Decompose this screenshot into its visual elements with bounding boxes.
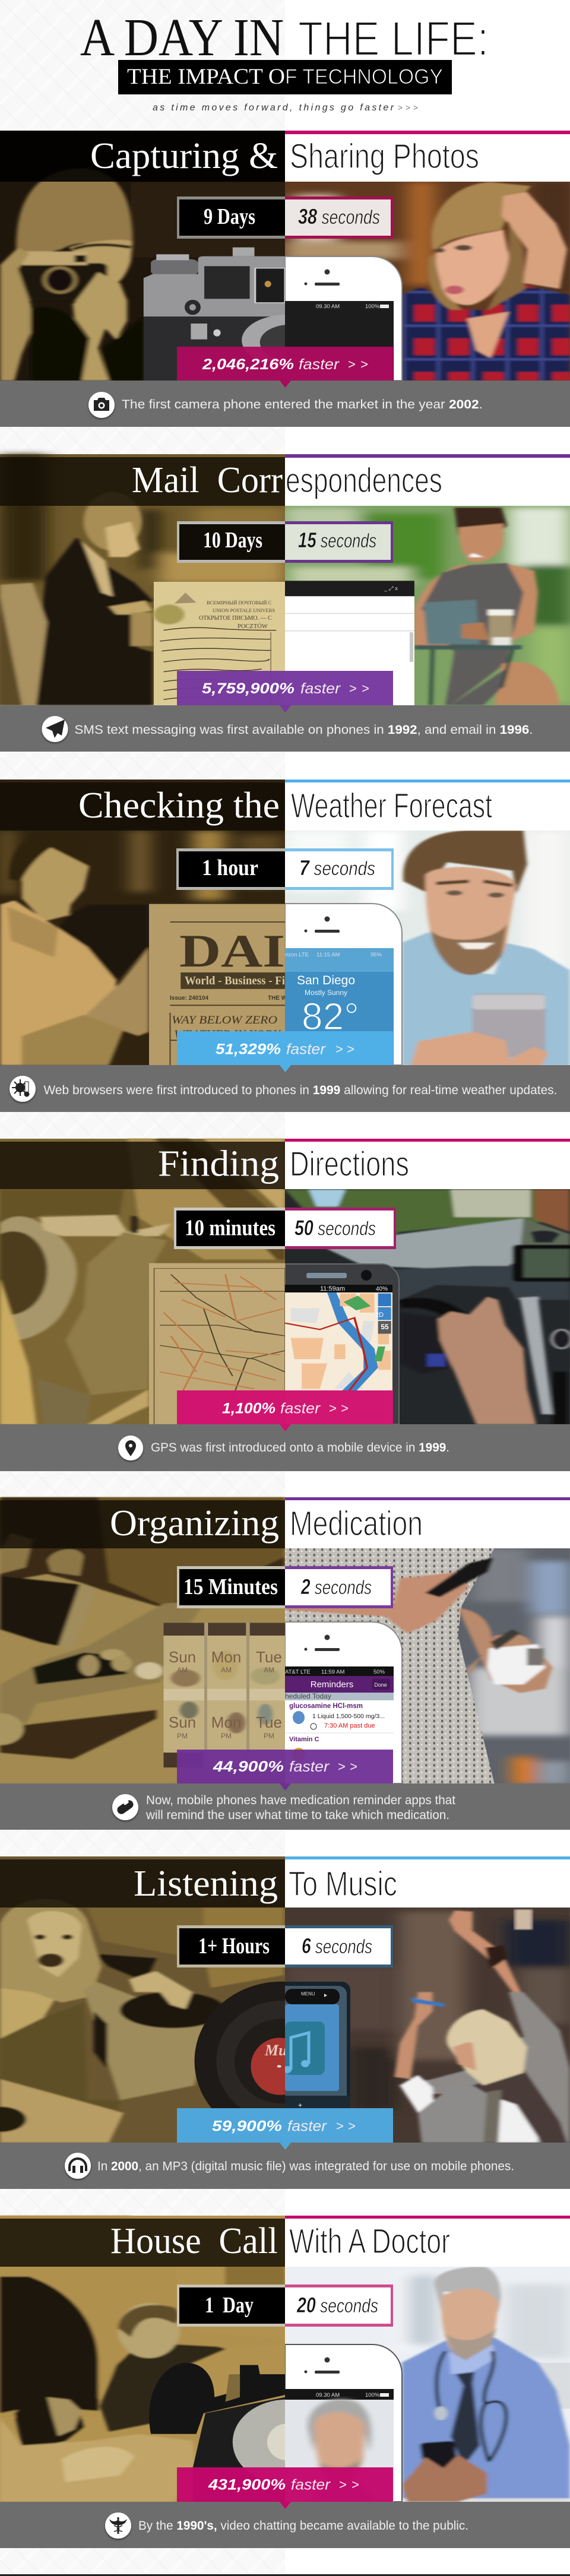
fact text: [145, 1794, 455, 1822]
accent bar: [285, 2216, 570, 2219]
section heading: [78, 785, 492, 826]
time comparison box: [177, 1566, 393, 1608]
accent bar: [285, 1139, 570, 1142]
speed bar: faster: [291, 2477, 331, 2493]
section heading: Directions: [290, 1145, 409, 1184]
speed bar: 59,900%: [212, 2118, 282, 2135]
modern photo: woman dancing with MP3 player: [283, 1908, 570, 2143]
vintage photo: man reading newspaper: [0, 780, 287, 1065]
section heading: With A Doctor: [289, 2222, 450, 2261]
time comparison box: 15 Minutes: [183, 1574, 278, 1599]
vintage photo: woman writing and postcard: [0, 454, 285, 705]
icon: smartphone with video chat: 09.30 AM: [316, 2392, 340, 2398]
time comparison box: [177, 2285, 393, 2327]
time comparison box: [177, 197, 393, 239]
section heading: [134, 1864, 397, 1904]
icon: smartphone with reminders app: 11:59 AM: [321, 1669, 345, 1675]
section: finding directions: [0, 1139, 570, 1471]
time comparison box: 38 seconds: [298, 204, 380, 229]
icon: sun and thermometer: [10, 1076, 36, 1102]
speed bar: > >: [338, 1759, 357, 1774]
vintage photo: hand with pills and organizer: Tue: [256, 1713, 282, 1731]
speed bar: > >: [335, 1041, 354, 1057]
vintage photo: man reading newspaper: DAI: [179, 925, 285, 977]
icon: smartphone with reminders app: glucosamine HCl-msm: [289, 1703, 363, 1710]
header band: modern: [285, 780, 570, 831]
time comparison box: 15 seconds: [298, 528, 376, 552]
header band: modern: [285, 1856, 570, 1908]
section heading: Listening: [134, 1864, 278, 1904]
section heading: Capturing &: [90, 136, 278, 176]
icon: smartphone with weather app: 11:15 AM: [316, 952, 340, 958]
time comparison box: [177, 521, 393, 563]
icon: paper plane: [42, 716, 68, 742]
speed bar: [177, 347, 393, 381]
speed bar: faster: [300, 680, 341, 697]
subtitle banner: F TECHNOLOGY: [285, 65, 443, 88]
icon: pill capsule: [112, 1794, 138, 1820]
vintage photo: hand with pills and organizer: PM: [221, 1732, 232, 1740]
postcard printed text: POCZTÓW: [238, 623, 268, 630]
vintage photo: man reading newspaper: WEATHER IN YORK: [174, 1028, 281, 1041]
vintage photo: hand with pills and organizer: AM: [177, 1666, 188, 1674]
time comparison box: 1+ Hours: [198, 1934, 270, 1959]
icon: smartphone with video chat: [285, 2344, 402, 2502]
speed bar: faster: [280, 1400, 321, 1417]
speed bar: 5,759,900%: [202, 680, 294, 697]
fact bar: [0, 1424, 570, 1471]
icon: smartphone with weather app: [285, 904, 402, 1065]
icon: smartphone with weather app: rizon LTE: [285, 952, 309, 958]
icon: camera: [88, 392, 115, 418]
icon: smartphone with reminders app: Reminders: [311, 1680, 353, 1690]
section heading: Medication: [290, 1504, 423, 1543]
section heading: espondences: [286, 461, 442, 500]
header band: modern: [285, 131, 570, 182]
icon: smartphone with reminders app: 1 Liquid 1,500-500 mg/3...: [312, 1713, 385, 1720]
postcard printed text: UNION POSTALE UNIVERS: [213, 607, 275, 613]
pill organizer: [163, 1623, 285, 1767]
vintage photo: hand with pills and organizer: Sun: [169, 1648, 196, 1666]
accent bar: [285, 780, 570, 782]
icon: smartphone with weather app: 82°: [302, 995, 359, 1038]
fact bar: In 2000, an MP3 (digital music file) was integrated for use on mobile phones.: [97, 2160, 514, 2173]
fact bar: Web browsers were first introduced to phones in 1999 allowing for real-time weather updates.: [44, 1083, 558, 1097]
header band: modern: [285, 2216, 570, 2267]
title: A DAY IN: [80, 8, 284, 67]
section heading: [110, 1503, 423, 1544]
section heading: [132, 460, 442, 500]
section heading: Weather Forecast: [291, 787, 492, 825]
speed bar: > >: [349, 681, 369, 696]
time comparison box: 50 seconds: [294, 1216, 376, 1240]
modern photo: doctor using phone: [285, 2265, 570, 2503]
vintage photo: hand with pills and organizer: Mon: [211, 1713, 241, 1731]
time comparison box: 1 hour: [202, 856, 258, 880]
vintage photo: car passengers and map: [0, 1139, 285, 1424]
section heading: To Music: [289, 1865, 397, 1903]
vintage photo: hand with pills and organizer: AM: [221, 1666, 232, 1674]
newspaper: [149, 904, 285, 1065]
speed bar: > >: [339, 2477, 359, 2492]
speed bar: [177, 1031, 393, 1065]
section: house call with a doctor: [0, 2216, 570, 2548]
time comparison box: 9 Days: [204, 204, 255, 229]
speed bar: > >: [348, 357, 368, 372]
vintage photo: hand with pills and organizer: Tue: [256, 1648, 282, 1666]
speed bar: [177, 2467, 393, 2502]
header band: modern: [285, 1497, 570, 1548]
accent bar: [285, 1497, 570, 1500]
icon: smartphone: [285, 256, 402, 381]
section: organizing medication: [0, 1497, 570, 1830]
tagline: >>>: [398, 103, 418, 112]
icon: smartphone with weather app: Mostly Sunny: [305, 988, 347, 997]
time comparison box: [174, 1208, 396, 1249]
vintage photo: man reading newspaper: Issue: 240104: [170, 995, 208, 1002]
header band: vintage: [0, 1500, 285, 1548]
icon: smartphone with video chat: 100%: [365, 2392, 380, 2398]
vintage photo: woman with record player: Mus: [264, 2042, 293, 2059]
modern photo: woman with tablet in park: _ ⤢ x: [384, 585, 398, 592]
time comparison box: 6 seconds: [302, 1934, 372, 1958]
speed bar: > >: [329, 1401, 349, 1415]
speed bar: faster: [287, 2118, 328, 2135]
vintage photo: hand with pills and organizer: Mon: [211, 1648, 241, 1666]
icon: MP3 player: +: [298, 2101, 302, 2109]
icon: smartphone with weather app: San Diego: [297, 974, 355, 987]
icon: smartphone with reminders app: Vitamin C: [289, 1736, 319, 1743]
vintage photo: woman with record player: [0, 1856, 369, 2143]
postcard printed text: ВСЕМІРНЫЙ ПОЧТОВЫЙ С: [207, 600, 272, 606]
accent bar: [285, 131, 570, 134]
fact bar: [0, 381, 570, 427]
section: mail correspondences: [0, 454, 570, 752]
icon: smartphone with reminders app: heduled Today: [285, 1692, 331, 1700]
section heading: House Call: [110, 2221, 278, 2261]
fact bar: By the 1990's, video chatting became available to the public.: [138, 2519, 468, 2533]
icon: GPS phone: [285, 1264, 399, 1424]
fact bar: [0, 2502, 570, 2548]
speed bar: [177, 671, 393, 705]
speed bar: 44,900%: [213, 1758, 284, 1775]
icon: headphones: [65, 2153, 91, 2179]
speed bar: > >: [336, 2118, 356, 2134]
icon: smartphone with reminders app: Done: [374, 1682, 387, 1688]
speed bar: 431,900%: [208, 2477, 286, 2493]
vintage photo: hand with pills and organizer: PM: [264, 1732, 274, 1740]
vintage photo: man reading newspaper: World - Business - Fi: [185, 974, 285, 987]
header band: vintage: [0, 131, 285, 182]
section heading: [90, 136, 479, 176]
icon: map pin: [118, 1436, 143, 1460]
postcard printed text: [199, 600, 275, 630]
icon: smartphone with reminders app: 7:30 AM past due: [324, 1722, 375, 1729]
vintage photo: woman with camera: [0, 131, 285, 381]
email window: [285, 581, 414, 705]
icon: rotary telephone: [149, 2363, 341, 2502]
section heading: [158, 1143, 409, 1184]
section heading: Mail Corr: [132, 460, 283, 500]
section heading: Sharing Photos: [290, 137, 479, 176]
speed bar: faster: [286, 1041, 327, 1058]
icon: smartphone with reminders app: 50%: [373, 1669, 385, 1675]
section heading: Finding: [158, 1143, 279, 1184]
fact text: Now, mobile phones have medication reminder apps that: [146, 1794, 455, 1807]
title: [80, 8, 489, 67]
accent bar: [285, 454, 570, 458]
subtitle banner: THE IMPACT O: [127, 65, 285, 89]
speed bar: 51,329%: [216, 1041, 281, 1058]
header band: vintage: [0, 2219, 285, 2267]
postcard: [154, 582, 285, 705]
header band: vintage: [0, 457, 285, 506]
title: THE LIFE:: [298, 12, 489, 66]
old road map: [149, 1263, 285, 1424]
icon: GPS phone: 2D: [375, 1311, 384, 1319]
postcard printed text: ОТКРЫТОЕ ПИСЬМО. — С: [199, 615, 272, 622]
vintage photo: hand with pills and organizer: Sun: [169, 1713, 196, 1731]
speed bar: 2,046,216%: [202, 356, 294, 373]
icon: smartphone with reminders app: [285, 1622, 402, 1783]
subtitle banner: [118, 60, 452, 94]
modern photo: man with phone: [285, 829, 570, 1066]
header band: vintage: [0, 1859, 285, 1908]
vintage photo: man reading newspaper: THE W: [268, 995, 287, 1002]
icon: caduceus: [105, 2512, 131, 2539]
fact bar: [0, 1065, 570, 1112]
icon: vintage camera: [144, 247, 285, 381]
icon: GPS phone: 40%: [376, 1286, 388, 1292]
vintage photo: hand with pills and organizer: AM: [264, 1666, 274, 1674]
icon: MP3 player: [283, 1982, 350, 2109]
fact bar: [0, 705, 570, 752]
icon: smartphone: 100%: [365, 303, 380, 310]
modern photo: woman with plaid shirt: [285, 180, 570, 382]
vintage photo: doctor with patient and rotary phone: [0, 2216, 341, 2502]
vintage photo: hand with pills and organizer: PM: [177, 1732, 188, 1740]
fact bar: SMS text messaging was first available on phones in 1992, and email in 1996.: [75, 723, 533, 737]
icon: MP3 player: MENU: [301, 1991, 315, 1997]
time comparison box: [177, 1925, 393, 1967]
speed bar: faster: [289, 1758, 330, 1775]
icon: GPS phone: 55: [381, 1323, 389, 1331]
fact bar: GPS was first introduced onto a mobile device in 1999.: [151, 1441, 449, 1455]
header band: vintage: [0, 782, 285, 831]
fact bar: [0, 2143, 570, 2189]
speed bar: 1,100%: [222, 1400, 276, 1417]
icon: smartphone with weather app: 95%: [370, 952, 382, 958]
speed bar: [177, 1390, 393, 1424]
header band: vintage: [0, 1142, 285, 1189]
vintage photo: man reading newspaper: WAY BELOW ZERO: [172, 1014, 277, 1026]
time comparison box: 2 seconds: [300, 1574, 372, 1599]
icon: smartphone: 09.30 AM: [316, 303, 340, 310]
speed bar: faster: [299, 356, 340, 373]
section: listening to music: [0, 1856, 570, 2189]
modern photo: driving with navigation: [285, 1189, 570, 1425]
vinyl record: [195, 1982, 369, 2141]
modern photo: woman in pharmacy: [285, 1547, 570, 1785]
time comparison box: 7 seconds: [299, 856, 375, 880]
header band: modern: [285, 1139, 570, 1189]
section heading: Organizing: [110, 1503, 279, 1544]
icon: smartphone with reminders app: AT&T LTE: [285, 1669, 311, 1675]
icon: GPS phone: 11:59am: [320, 1285, 345, 1292]
tagline: as time moves forward, things go faster: [153, 103, 394, 113]
vintage photo: hand with pills and organizer: [0, 1497, 285, 1783]
speed bar: [177, 1750, 393, 1783]
time comparison box: 10 minutes: [185, 1216, 276, 1241]
fact bar: The first camera phone entered the market in the year 2002.: [122, 398, 483, 411]
section: checking the weather forecast: [0, 780, 570, 1112]
fact text: will remind the user what time to take which medication.: [145, 1808, 449, 1822]
time comparison box: 1 Day: [205, 2293, 254, 2318]
accent bar: [285, 1856, 570, 1859]
time comparison box: [176, 848, 394, 890]
time comparison box: 10 Days: [203, 528, 262, 553]
time comparison box: 20 seconds: [296, 2293, 378, 2317]
section: capturing and sharing photos: [0, 131, 570, 427]
header band: modern: [285, 454, 570, 506]
section heading: Checking the: [78, 785, 280, 826]
fact bar: [0, 1783, 570, 1830]
speed bar: [177, 2108, 393, 2143]
modern photo: woman with tablet in park: [285, 505, 570, 705]
section heading: [110, 2221, 450, 2261]
